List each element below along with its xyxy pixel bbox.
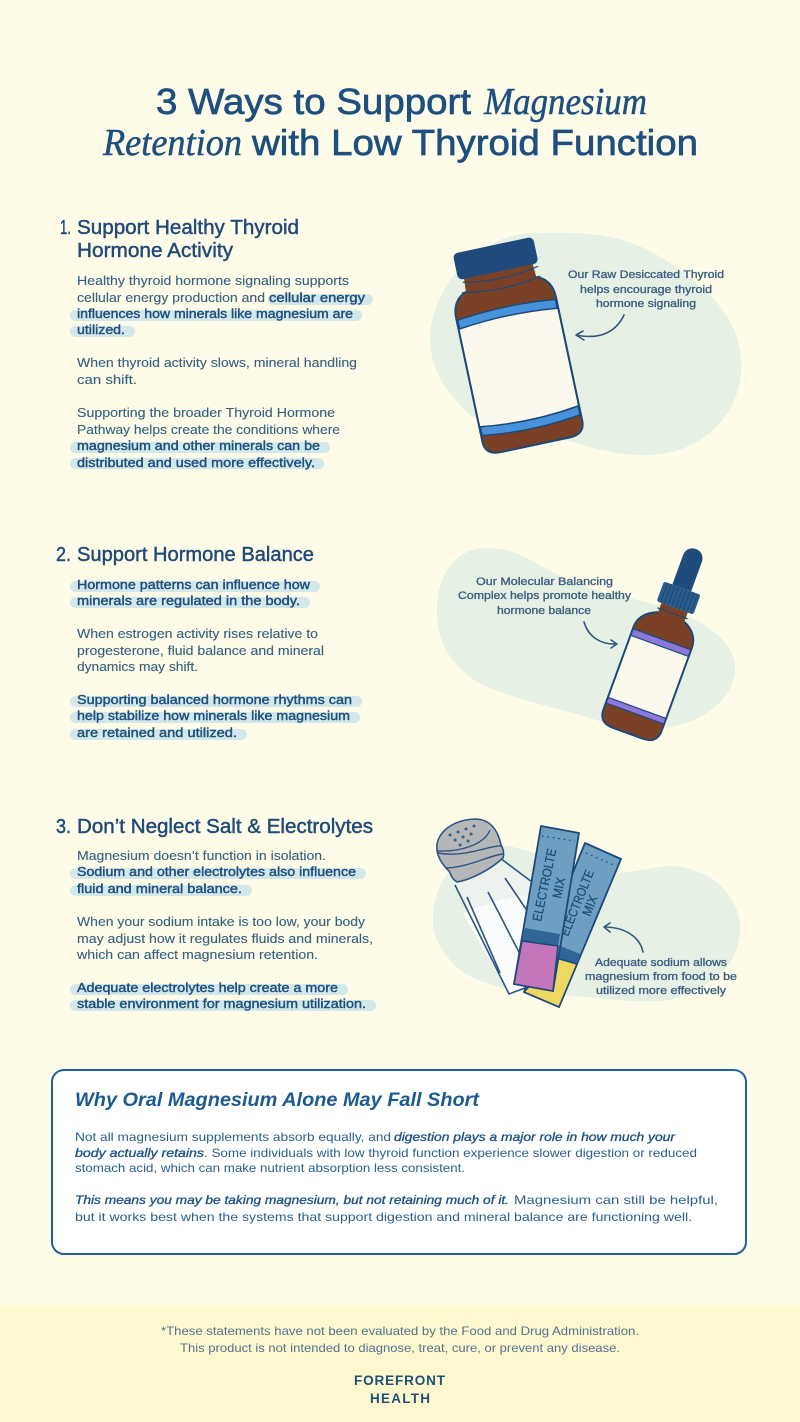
electrolyte packet back: ELECTROLTE xyxy=(557,867,597,938)
section 2: hormone balance xyxy=(56,544,362,740)
section 3 body text: Adequate electrolytes help create a more xyxy=(77,981,338,995)
panel body text: Magnesium can still be helpful, xyxy=(514,1193,718,1207)
section 1 body text xyxy=(70,274,373,470)
title: Magnesium xyxy=(483,81,647,123)
callout: raw desiccated thyroid: helps encourage thyroid xyxy=(580,284,712,296)
title: 3 Ways to Support xyxy=(156,81,471,122)
section 1 heading: Support Healthy Thyroid xyxy=(77,217,299,239)
illustration: salt shaker and electrolyte packets xyxy=(433,819,740,1007)
section 2 body text: help stabilize how minerals like magnesium xyxy=(77,709,350,723)
panel heading: Why Oral Magnesium Alone May Fall Short xyxy=(75,1090,480,1111)
callout: adequate sodium: utilized more effectively xyxy=(596,985,727,997)
electrolyte packet back: MIX xyxy=(579,893,601,918)
electrolyte packet back xyxy=(524,843,621,1007)
section 2 body text: dynamics may shift. xyxy=(77,660,198,674)
logo: forefront health xyxy=(354,1373,446,1406)
section 3 body text: may adjust how it regulates fluids and minerals, xyxy=(77,932,373,946)
callout: adequate sodium xyxy=(585,957,737,997)
electrolyte packet front xyxy=(514,826,579,991)
bottle xyxy=(443,235,585,455)
logo: forefront health: HEALTH xyxy=(370,1391,430,1406)
section 1 body text: Pathway helps create the conditions where xyxy=(77,423,340,437)
section 1 body text: Supporting the broader Thyroid Hormone xyxy=(77,406,335,420)
section 1 heading: 1. xyxy=(60,217,71,239)
disclaimer: This product is not intended to diagnose, treat, cure, or prevent any disease. xyxy=(180,1341,620,1355)
section 2 body text: Supporting balanced hormone rhythms can xyxy=(77,693,352,707)
panel body text: but it works best when the systems that support digestion and mineral balance are functioning well. xyxy=(75,1210,692,1224)
section 3 body text: which can affect magnesium retention. xyxy=(76,948,318,962)
salt shaker xyxy=(437,819,545,994)
section 2 heading: Support Hormone Balance xyxy=(77,544,314,566)
section 1: thyroid hormone activity xyxy=(60,217,373,470)
callout: molecular balancing complex: Our Molecular Balancing xyxy=(476,576,613,588)
section 1 body text: magnesium and other minerals can be xyxy=(77,439,320,453)
callout: adequate sodium: magnesium from food to be xyxy=(585,971,737,983)
title: Retention xyxy=(102,122,242,164)
section 3 body text xyxy=(70,849,376,1011)
section 3 body text: stable environment for magnesium utilization. xyxy=(77,997,366,1011)
section 2 body text: minerals are regulated in the body. xyxy=(77,594,300,608)
electrolyte packet front: MIX xyxy=(549,876,568,900)
arrow to packets xyxy=(604,923,643,952)
footer xyxy=(0,1305,800,1422)
callout: raw desiccated thyroid xyxy=(568,269,724,310)
section 3 body text: When your sodium intake is too low, your body xyxy=(77,915,366,929)
title: with Low Thyroid Function xyxy=(251,122,698,163)
disclaimer: *These statements have not been evaluated by the Food and Drug Administration. xyxy=(161,1324,639,1338)
logo: forefront health: FOREFRONT xyxy=(354,1373,446,1388)
panel body text: digestion plays a major role in how much your xyxy=(394,1130,676,1144)
callout: molecular balancing complex xyxy=(458,576,632,617)
background blob 2 xyxy=(437,548,735,729)
illustration: thyroid supplement bottle xyxy=(430,233,741,455)
background blob 3 xyxy=(433,845,740,1001)
panel body text xyxy=(75,1130,718,1224)
section 2 body text: Hormone patterns can influence how xyxy=(77,578,311,592)
callout: adequate sodium: Adequate sodium allows xyxy=(595,957,728,969)
callout: molecular balancing complex: Complex helps promote healthy xyxy=(458,590,632,602)
panel body text: body actually retains xyxy=(75,1146,204,1160)
panel body text: This means you may be taking magnesium, but not retaining much of it. xyxy=(75,1193,509,1207)
callout: molecular balancing complex: hormone balance xyxy=(497,605,591,617)
title xyxy=(102,81,698,164)
dropper bottle xyxy=(599,538,724,744)
section 3 heading: Don’t Neglect Salt & Electrolytes xyxy=(77,816,373,838)
section 2 body text: are retained and utilized. xyxy=(77,726,237,740)
section 3: salt and electrolytes xyxy=(56,816,376,1011)
section 2 heading: 2. xyxy=(56,544,71,566)
arrow to dropper bottle xyxy=(584,622,617,648)
panel body text: . Some individuals with low thyroid function experience slower digestion or reduced xyxy=(204,1146,697,1160)
panel body text: stomach acid, which can make nutrient absorption less consistent. xyxy=(75,1161,465,1175)
section 3 body text: fluid and mineral balance. xyxy=(77,882,242,896)
callout: raw desiccated thyroid: Our Raw Desiccated Thyroid xyxy=(568,269,724,281)
section 1 body text: cellular energy xyxy=(269,291,366,305)
shaker holes xyxy=(450,826,474,845)
section 3 body text: Magnesium doesn’t function in isolation. xyxy=(77,849,326,863)
section 1 body text: Healthy thyroid hormone signaling supports xyxy=(77,274,349,288)
section 2 body text: When estrogen activity rises relative to xyxy=(77,627,318,641)
section 3 heading: 3. xyxy=(56,816,71,838)
disclaimer xyxy=(161,1324,639,1355)
illustration: dropper bottle xyxy=(437,538,735,744)
callout: raw desiccated thyroid: hormone signaling xyxy=(596,298,696,310)
section 1 heading xyxy=(60,217,299,262)
section 1 body text: can shift. xyxy=(77,373,137,387)
background blob 1 xyxy=(430,233,741,455)
section 1 body text: utilized. xyxy=(77,323,125,337)
section 1 body text: influences how minerals like magnesium are xyxy=(77,307,353,321)
section 2 body text: progesterone, fluid balance and mineral xyxy=(77,644,324,658)
arrow to bottle xyxy=(576,315,624,340)
section 2 body text xyxy=(70,578,362,740)
section 1 body text: distributed and used more effectively. xyxy=(77,456,315,470)
section 1 heading: Hormone Activity xyxy=(77,240,233,262)
section 1 body text: When thyroid activity slows, mineral handling xyxy=(77,356,357,370)
panel body text: Not all magnesium supplements absorb equally, and xyxy=(75,1130,391,1144)
electrolyte packet front: ELECTROLTE xyxy=(529,847,559,923)
panel: why oral magnesium alone may fall short xyxy=(52,1070,746,1254)
section 1 body text: cellular energy production and xyxy=(77,291,265,305)
section 3 body text: Sodium and other electrolytes also influence xyxy=(77,865,356,879)
